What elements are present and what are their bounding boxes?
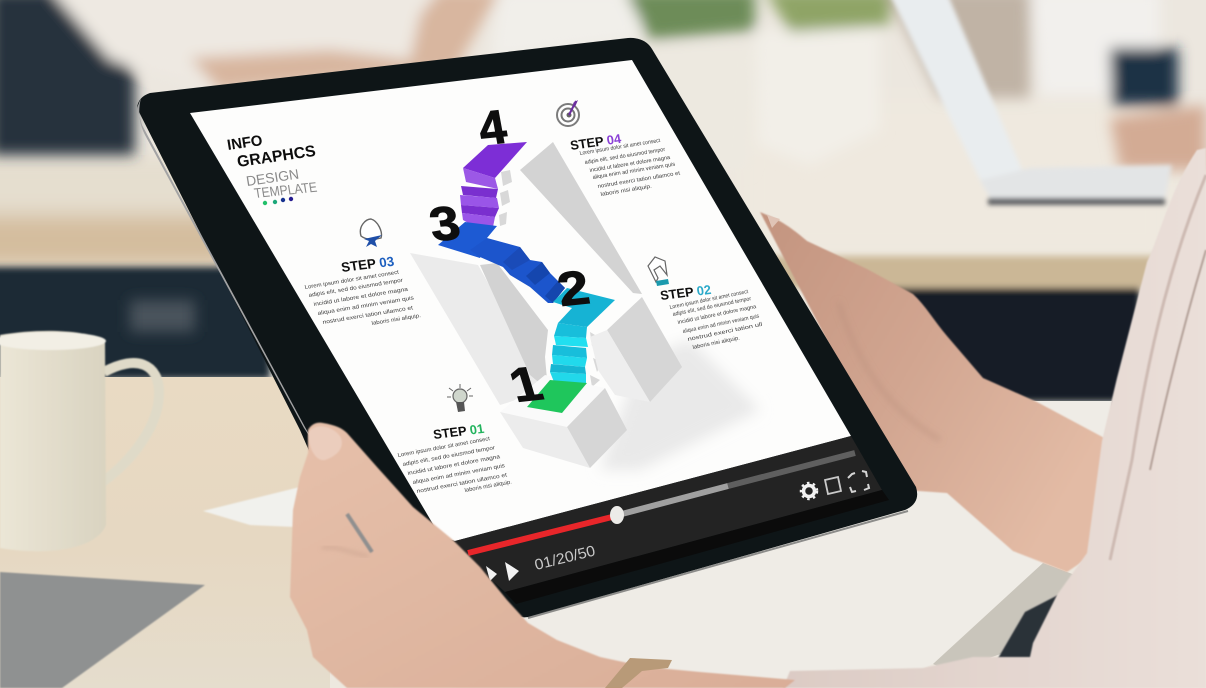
- buffered segment: [618, 486, 728, 515]
- step 02 text block: adipis elit, sed do eiusmod tempor: [672, 296, 752, 318]
- purple steps: [460, 168, 499, 227]
- purple landing: [463, 142, 527, 178]
- thumbnail: [309, 426, 342, 460]
- step 03 text block: aliqua enim ad minim veniam quis: [317, 295, 415, 317]
- step 03 text block: adipis elit, sed do eiusmod tempor: [308, 278, 404, 299]
- step 03 text block: [304, 254, 422, 327]
- chrome bottom edge: [528, 511, 908, 618]
- icon: fullscreen: [848, 471, 869, 492]
- step 03 text block: laboris nisi aliquip.: [371, 313, 422, 327]
- arm and shirt, right: [760, 148, 1206, 688]
- block shadows: [600, 340, 760, 470]
- silver tablet edge: [137, 98, 312, 440]
- step 01 text block: incidid ut labore et dolore magna: [407, 454, 502, 477]
- numbers: [425, 101, 594, 412]
- table underside band: [933, 563, 1075, 672]
- tablet: [137, 38, 917, 618]
- icon: light bulb: [447, 384, 473, 412]
- green landing: [527, 380, 587, 413]
- step 02 text block: nostrud exerci tation ull: [687, 322, 763, 343]
- background laptop, top right: [890, 0, 1172, 205]
- step 04 text block: STEP 04: [569, 131, 623, 153]
- paper on desk: [203, 487, 300, 527]
- step 02 text block: Lorem ipsum dolor sit amet consect: [669, 289, 749, 311]
- heading: [226, 133, 318, 205]
- step 04 text block: adipis elit, sed do eiusmod tempor: [584, 147, 666, 166]
- step 03 text block: Lorem ipsum dolor sit amet consect: [304, 270, 400, 291]
- icon: settings gear: [801, 483, 817, 499]
- coffee mug: [0, 331, 159, 551]
- isometric stairs graphic: [410, 101, 760, 470]
- step 04 text block: aliqua enim ad minim veniam quis: [592, 162, 676, 181]
- table top, right: [480, 401, 1112, 688]
- step 01 text block: Lorem ipsum dolor sit amet consect: [397, 436, 491, 459]
- gap between thumb and fingers: [347, 514, 372, 552]
- timestamp: 01/20/50: [533, 543, 597, 574]
- laptop corner, bottom left: [0, 572, 205, 688]
- tablet screen: [190, 60, 851, 541]
- step 04 text block: [569, 131, 681, 198]
- video player bar: [455, 436, 889, 604]
- icon: helmet with star: [360, 219, 382, 247]
- heading: INFO: [226, 133, 264, 154]
- numbers: 1: [503, 357, 548, 412]
- step 04 text block: nostrud exerci tation ullamco et: [597, 171, 681, 190]
- block 1 top: [500, 375, 605, 427]
- step 02 text block: STEP 02: [659, 282, 712, 303]
- numbers: 4: [474, 101, 511, 156]
- step 04 text block: Lorem ipsum dolor sit amet consect: [579, 138, 661, 157]
- icon: window: [825, 477, 841, 494]
- stair side notches: [499, 170, 602, 387]
- blue steps: [470, 238, 565, 303]
- right finger nail tip: [767, 215, 780, 228]
- table top, left: [0, 377, 330, 688]
- heading: TEMPLATE: [253, 179, 318, 201]
- step 02 text block: laboris nisi aliquip.: [692, 335, 741, 351]
- heading: DESIGN: [245, 166, 300, 189]
- step 04 text block: laboris nisi aliquip.: [600, 184, 653, 198]
- tall block: [520, 142, 642, 294]
- block 1 side face: [567, 388, 627, 468]
- step 02 text block: incidid ut labore et dolore magna: [677, 304, 758, 326]
- icon: chess knight: [648, 257, 669, 286]
- step 02 text block: aliqua enim ad minim veniam quis: [682, 313, 760, 335]
- previous button: [486, 566, 497, 581]
- blue landing: [438, 222, 497, 258]
- step 01 text block: laboris nisi aliquip.: [464, 479, 513, 494]
- step 2 block: [607, 297, 682, 402]
- seek track: [728, 453, 855, 486]
- step 03 text block: STEP 03: [340, 254, 395, 275]
- left hand: [290, 423, 795, 688]
- step 03 text block: incidid ut labore et dolore magna: [313, 287, 410, 308]
- step 3 block: [410, 253, 548, 405]
- step 01 text block: STEP 01: [432, 421, 485, 442]
- step 02 text block: [659, 282, 763, 351]
- numbers: 2: [553, 260, 594, 316]
- numbers: 3: [425, 195, 464, 251]
- step 01 text block: [397, 421, 513, 495]
- step 01 text block: adipis elit, sed do eiusmod tempor: [402, 445, 496, 468]
- scrubber knob: [610, 506, 624, 524]
- tablet body: [137, 38, 917, 617]
- heading: GRAPHCS: [236, 143, 317, 171]
- play button: [505, 562, 519, 581]
- cyan steps: [550, 323, 588, 384]
- step 01 text block: nostrud exerci tation ullamco et: [416, 472, 508, 495]
- cyan landing: [553, 288, 615, 327]
- step 04 text block: incidid ut labore et dolore magna: [589, 155, 672, 174]
- played segment: [468, 517, 612, 553]
- wristwatch: [605, 658, 672, 688]
- block 1 front face: [500, 412, 590, 468]
- step 01 text block: aliqua enim ad minim veniam quis: [412, 463, 506, 486]
- step 03 text block: nostrud exerci tation ullamco et: [322, 305, 414, 326]
- icon: target: [557, 100, 579, 126]
